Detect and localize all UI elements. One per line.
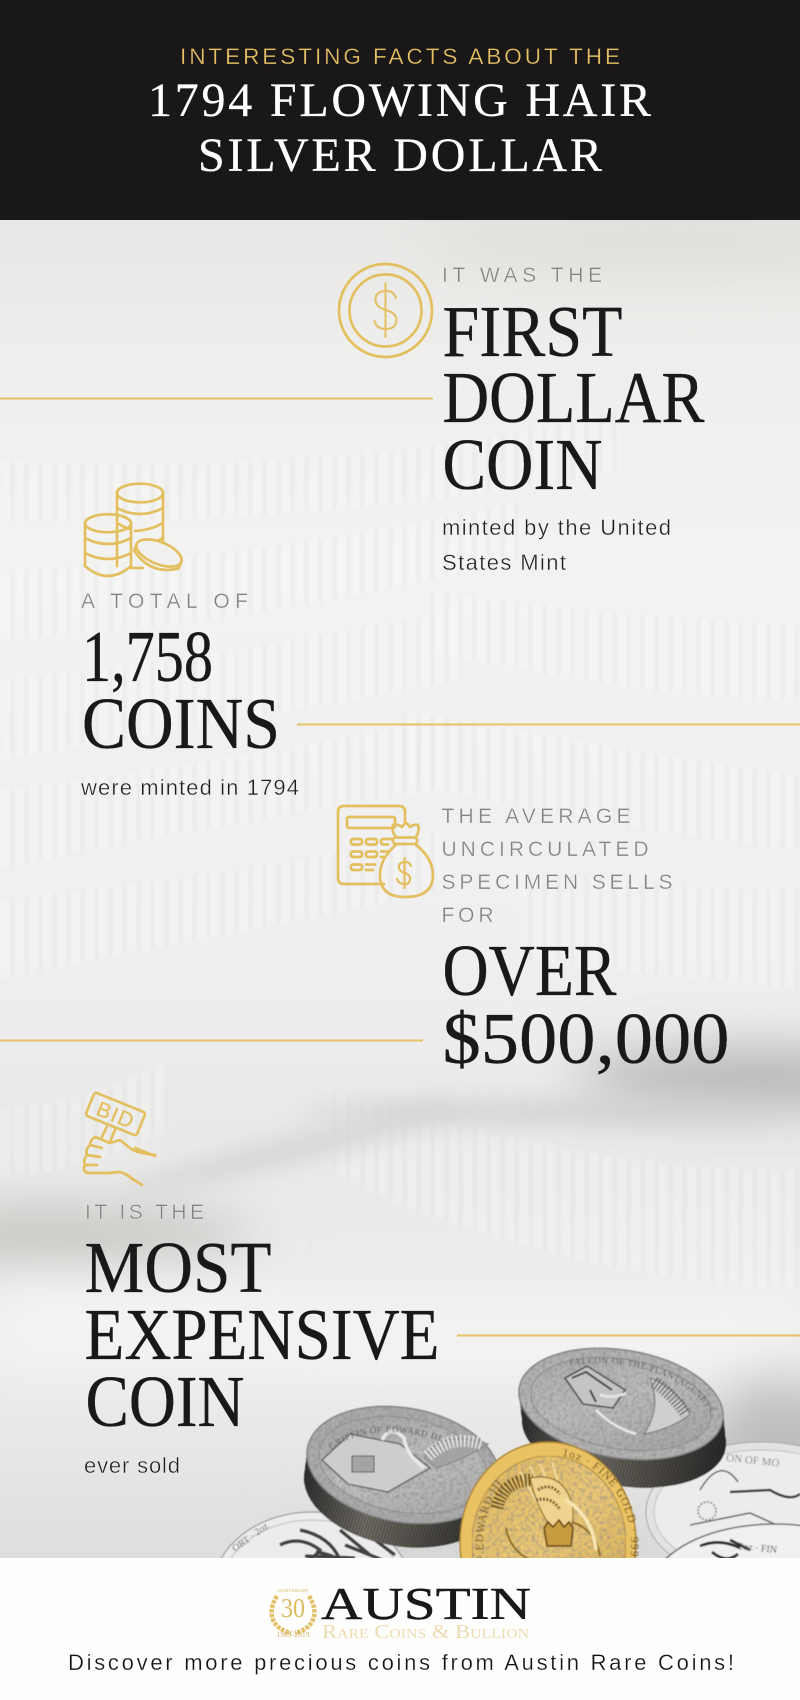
- icon: calculator and money bag: [338, 806, 433, 897]
- headline: [84, 1227, 440, 1442]
- call to action: Discover more precious coins from Austin Rare Coins!: [68, 1650, 734, 1675]
- description: minted by the United: [442, 515, 671, 540]
- kicker: SPECIMEN SELLS: [442, 871, 672, 894]
- silver coin left: [303, 1405, 497, 1548]
- silver coin left: GRIFFIN OF EDWARD III: [329, 1426, 442, 1450]
- description: [442, 515, 671, 575]
- footer band: [0, 1558, 800, 1700]
- icon: dollar coin: [339, 264, 432, 357]
- silver coin top right: FALCON OF THE PLANTAGENETS: [570, 1357, 714, 1413]
- white coin right: ON OF MO: [726, 1452, 780, 1470]
- headline: COIN: [442, 424, 602, 505]
- headline: EXPENSIVE: [84, 1294, 440, 1375]
- logo wordmark: AUSTIN: [321, 1579, 531, 1629]
- divider line: [457, 1334, 800, 1336]
- fact 1: first dollar coin: [0, 264, 705, 575]
- title kicker: INTERESTING FACTS ABOUT THE: [180, 44, 620, 69]
- logo emblem: 30 year wreath: 30: [281, 1593, 305, 1623]
- title line one: 1794 FLOWING HAIR: [148, 74, 651, 127]
- headline: [442, 291, 705, 505]
- headline: FIRST: [442, 291, 622, 372]
- logo emblem: 30 year wreath: [272, 1588, 314, 1639]
- description: States Mint: [442, 550, 566, 575]
- gold coin: 1oz · FINE GOLD · 9999 · 20: [562, 1448, 640, 1557]
- title line two: SILVER DOLLAR: [198, 129, 602, 182]
- logo tagline: Rare Coins & Bullion: [322, 1621, 529, 1643]
- header band: [0, 0, 800, 220]
- headline: 1,758: [82, 616, 213, 697]
- description: ever sold: [84, 1453, 180, 1478]
- logo: [272, 1579, 531, 1643]
- kicker: FOR: [442, 904, 494, 927]
- coin pile: [220, 1347, 800, 1558]
- headline: MOST: [84, 1227, 272, 1308]
- headline: [442, 930, 730, 1079]
- headline: DOLLAR: [442, 357, 705, 438]
- white coin right: [645, 1442, 800, 1555]
- white coin front right: 2oz · FIN: [738, 1541, 778, 1556]
- kicker: IT IS THE: [85, 1201, 204, 1224]
- silver coin top right: [518, 1347, 727, 1488]
- icon: bid paddle: BID: [93, 1098, 137, 1133]
- icon: coin stacks: [85, 484, 185, 576]
- headline: OVER: [442, 930, 617, 1011]
- logo emblem: 30 year wreath: ANNIVERSARY: [277, 1588, 310, 1593]
- gold coin: OF EDWARD III: [475, 1480, 502, 1558]
- white coin front right: [664, 1522, 800, 1558]
- divider line: [297, 724, 800, 726]
- description: were minted in 1794: [80, 775, 299, 800]
- white coin bottom left: ORT · 2oz: [230, 1521, 271, 1554]
- gold coin: [458, 1440, 640, 1558]
- headline: COIN: [86, 1361, 244, 1442]
- fact 4: most expensive coin: [84, 1092, 800, 1478]
- headline: [82, 616, 280, 764]
- fact 3: over $500,000: [0, 805, 730, 1079]
- fact 2: 1,758 coins: [80, 484, 800, 800]
- kicker: THE AVERAGE: [442, 805, 630, 828]
- headline: COINS: [82, 683, 280, 764]
- kicker: [442, 805, 672, 927]
- white coin bottom left: [220, 1511, 404, 1558]
- kicker: UNCIRCULATED: [442, 838, 648, 861]
- logo emblem: 30 year wreath: 1989-2019: [276, 1631, 310, 1639]
- kicker: IT WAS THE: [442, 264, 602, 287]
- divider line: [0, 398, 433, 400]
- title block: [148, 44, 651, 182]
- divider line: [0, 1040, 423, 1042]
- icon: bid paddle: [84, 1092, 155, 1185]
- headline: $500,000: [442, 998, 730, 1079]
- kicker: A TOTAL OF: [81, 590, 248, 613]
